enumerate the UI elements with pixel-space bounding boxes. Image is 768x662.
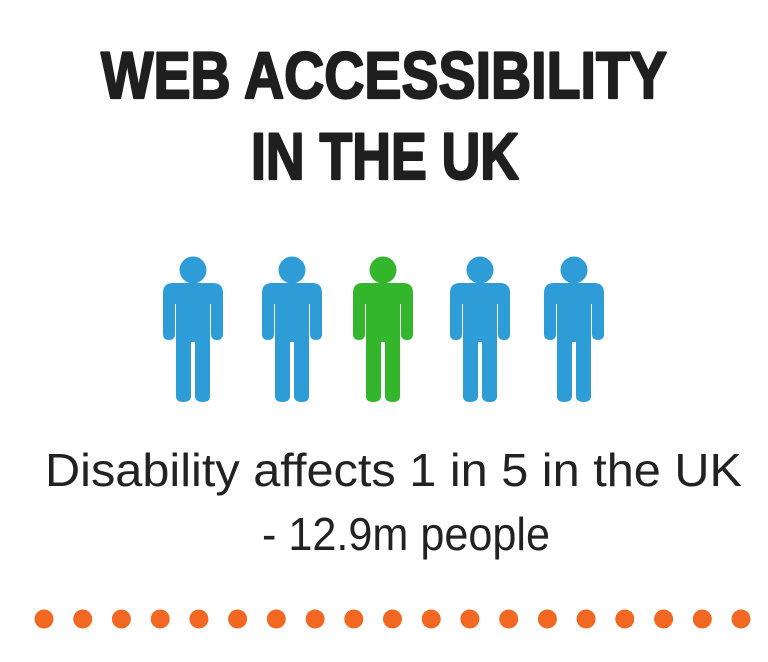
title xyxy=(101,38,667,193)
icon: person 3 highlighted xyxy=(353,256,413,402)
title: WEB ACCESSIBILITY xyxy=(101,38,667,112)
icon: person 2 xyxy=(262,256,322,402)
icon: person 1 xyxy=(163,256,223,402)
statistic text: - 12.9m people xyxy=(262,508,550,560)
icon row: people xyxy=(163,256,604,402)
icon: person 5 xyxy=(544,256,604,402)
statistic text: Disability affects 1 in 5 in the UK xyxy=(45,444,742,496)
icon: person 4 xyxy=(450,256,510,402)
title: IN THE UK xyxy=(251,119,519,193)
statistic text xyxy=(45,444,742,560)
dotted divider xyxy=(34,610,750,628)
